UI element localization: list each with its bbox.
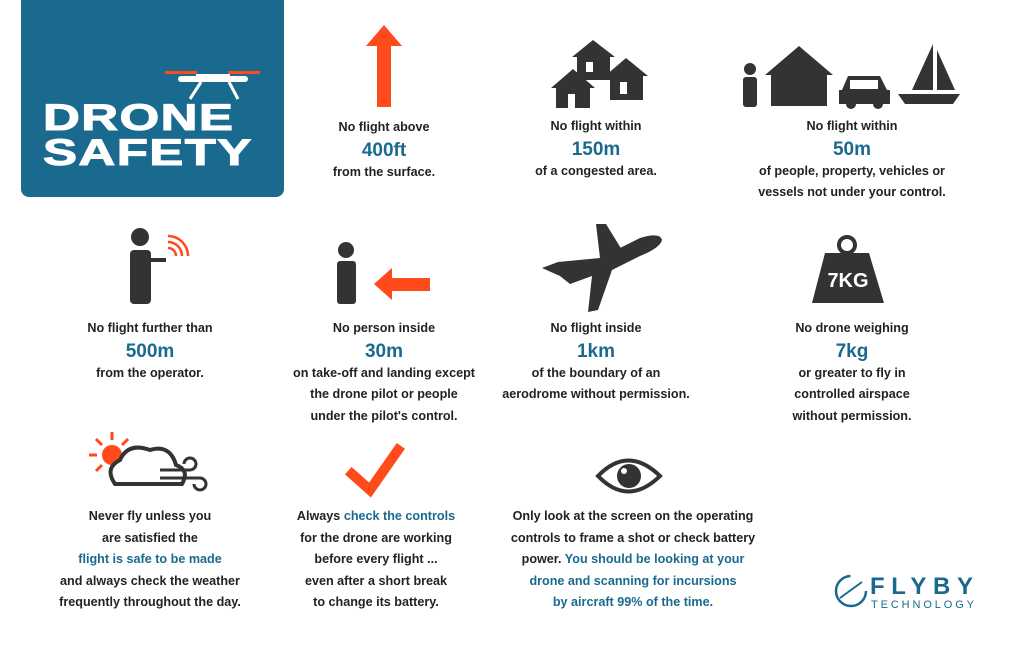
text: 30m: No person inside on take-off and landing except <box>293 321 475 380</box>
logo: flyby: FLYBY <box>870 573 974 600</box>
text: controls: Always check the controls <box>297 509 455 523</box>
text: 30m: the drone pilot or people <box>310 387 458 401</box>
icon: person house car boat <box>743 44 960 109</box>
text: 400ft: 400ft <box>362 140 406 160</box>
text: weather: and always check the weather <box>60 574 240 588</box>
text: 7kg <box>792 321 911 422</box>
text: 500m: No flight further than from the operator. <box>87 321 213 380</box>
text: weather: frequently throughout the day. <box>59 595 241 609</box>
title text: DRONE <box>43 97 234 138</box>
text: 150m: No flight within of a congested area. <box>535 119 657 178</box>
icon: check <box>352 450 398 490</box>
text: 30m: under the pilot's control. <box>310 408 458 422</box>
icon: drone <box>165 71 260 99</box>
icon: operator with remote <box>130 228 188 304</box>
text: controls <box>297 509 455 609</box>
icon: weight: 7KG <box>827 270 869 292</box>
logo: flyby <box>836 573 975 611</box>
text: screen: drone and scanning for incursions <box>529 574 737 588</box>
text: 1km: aerodrome without permission. <box>502 387 690 401</box>
text: controls: to change its battery. <box>313 595 439 609</box>
text: 1km: No flight inside of the boundary of an <box>532 321 660 380</box>
text: weather: Never fly unless you <box>89 509 211 523</box>
text: 1km <box>502 321 690 401</box>
text: 30m <box>293 321 475 422</box>
text: 150m: 150m <box>572 138 620 160</box>
text: 7kg: No drone weighing or greater to fly in <box>795 321 909 380</box>
text: screen: controls to frame a shot or check battery <box>511 530 755 544</box>
text: screen: power. You should be looking at your <box>522 552 744 566</box>
title text: SAFETY <box>43 132 253 173</box>
text: 50m: No flight within of people, property, vehicles or <box>759 119 945 178</box>
icon: weight <box>812 237 884 303</box>
title panel <box>21 0 284 197</box>
text: 50m: 50m <box>833 138 871 160</box>
icon: up arrow <box>366 25 402 107</box>
text: 400ft: No flight above from the surface. <box>333 120 435 178</box>
text: 1km: 1km <box>577 340 615 362</box>
text: weather <box>59 509 241 609</box>
text: 50m: vessels not under your control. <box>758 185 946 199</box>
logo: flyby: TECHNOLOGY <box>871 599 975 611</box>
title text <box>43 97 253 173</box>
text: weather: are satisfied the <box>102 530 198 544</box>
text: 500m: 500m <box>126 340 174 362</box>
text: screen: Only look at the screen on the operating <box>513 509 753 523</box>
text: 7kg: controlled airspace <box>794 387 910 401</box>
text: controls: even after a short break <box>305 574 447 588</box>
icon: person with arrow <box>337 242 430 304</box>
icon: weather <box>89 432 206 490</box>
text: 30m: 30m <box>365 340 403 362</box>
icon: airplane <box>542 224 662 312</box>
text: 7kg: 7kg <box>836 340 868 362</box>
text: controls: before every flight ... <box>314 552 438 566</box>
text: controls: for the drone are working <box>300 530 452 544</box>
icon: eye <box>598 460 660 492</box>
text: screen <box>511 509 755 609</box>
text: weather: flight is safe to be made <box>78 552 222 566</box>
icon: houses <box>551 40 648 108</box>
text: screen: by aircraft 99% of the time. <box>553 595 713 609</box>
text: 7kg: without permission. <box>793 408 911 422</box>
